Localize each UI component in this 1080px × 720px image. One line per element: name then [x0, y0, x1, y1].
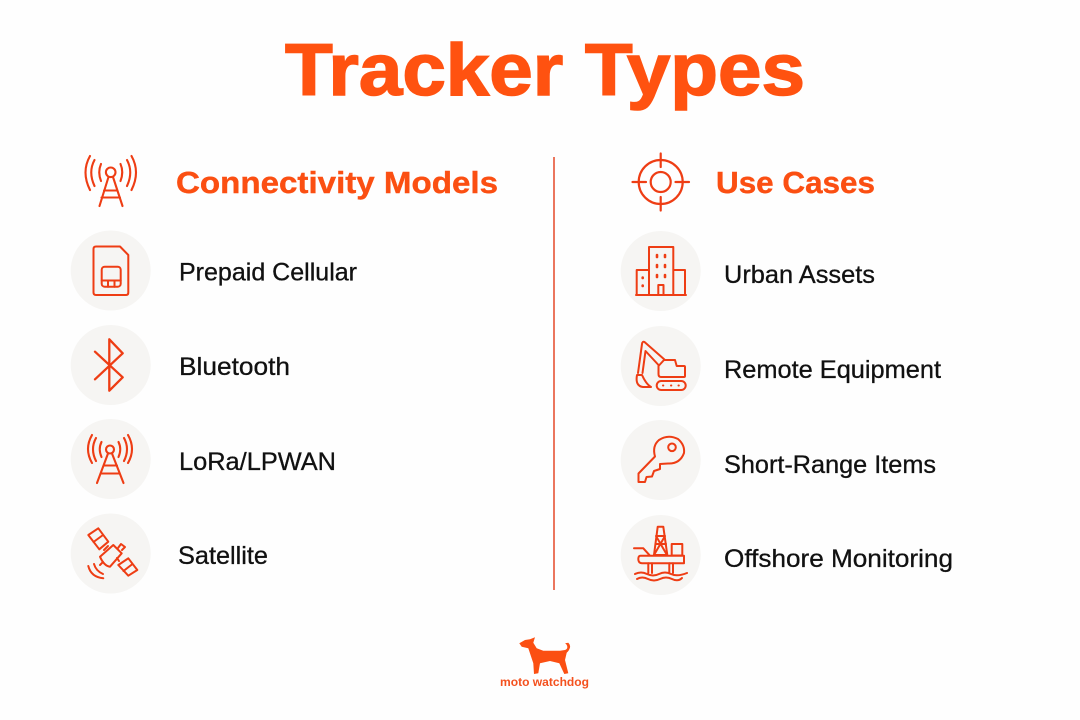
- divider: [553, 157, 555, 590]
- logo: moto watchdog: [500, 637, 589, 689]
- label: Short-Range Items: [724, 451, 936, 479]
- icon background: [71, 419, 151, 499]
- item: lora/lpwan: [71, 419, 336, 499]
- item: bluetooth: [71, 325, 290, 405]
- icon background: [621, 420, 701, 500]
- panel: use cases: [621, 154, 953, 595]
- icon: target: [632, 154, 689, 210]
- item: urban assets: [621, 231, 875, 311]
- icon background: [71, 514, 151, 594]
- icon: buildings: [636, 247, 686, 295]
- icon background: [621, 326, 701, 406]
- icon: radio tower: [86, 156, 136, 206]
- label: Satellite: [178, 542, 268, 570]
- heading: connectivity models: Connectivity Models: [176, 165, 498, 200]
- label: Bluetooth: [179, 353, 290, 381]
- heading: use cases: Use Cases: [716, 165, 875, 200]
- icon: radio tower: [88, 435, 132, 483]
- wordmark: moto watchdog: [500, 677, 589, 689]
- icon background: [71, 230, 151, 310]
- icon: key: [638, 437, 684, 482]
- panel: connectivity models: [71, 156, 498, 594]
- icon: oil platform: [634, 527, 687, 580]
- label: Urban Assets: [724, 261, 875, 289]
- item: prepaid cellular: [71, 230, 357, 310]
- icon: SIM card: [94, 246, 128, 295]
- icon background: [71, 325, 151, 405]
- icon background: [621, 231, 701, 311]
- item: short-range items: [621, 420, 936, 500]
- label: Offshore Monitoring: [724, 545, 953, 573]
- icon: excavator: [637, 342, 686, 390]
- item: satellite: [71, 514, 268, 594]
- icon: bluetooth: [95, 339, 123, 391]
- label: LoRa/LPWAN: [179, 448, 336, 476]
- item: remote equipment: [621, 326, 941, 406]
- item: offshore monitoring: [621, 515, 953, 595]
- label: Remote Equipment: [724, 356, 941, 384]
- icon: satellite: [88, 528, 137, 578]
- icon background: [621, 515, 701, 595]
- icon: dog: [519, 637, 570, 674]
- label: Prepaid Cellular: [179, 258, 357, 286]
- title: Tracker Types: [285, 30, 805, 111]
